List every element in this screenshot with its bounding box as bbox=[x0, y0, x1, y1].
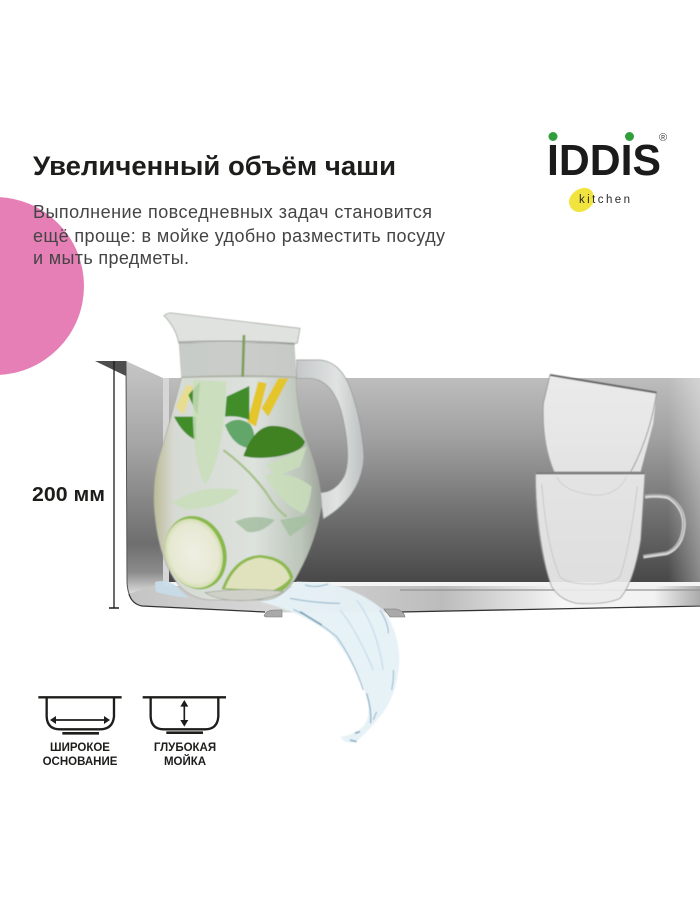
label: wide base: ОСНОВАНИЕ bbox=[43, 756, 118, 768]
description text bbox=[33, 202, 445, 268]
water splash bbox=[260, 582, 399, 743]
dimension line bbox=[109, 361, 119, 608]
mint stem bbox=[243, 335, 244, 377]
label: deep sink: МОЙКА bbox=[164, 755, 206, 768]
sink bottom edge bbox=[129, 594, 700, 612]
description text: Выполнение повседневных задач становится bbox=[33, 202, 432, 222]
glass pitcher with lime water bbox=[154, 313, 364, 601]
icon: deep sink bbox=[143, 697, 226, 733]
sink feet bbox=[264, 609, 405, 617]
top flange bbox=[95, 361, 126, 376]
back wall bbox=[162, 378, 700, 582]
pitcher handle bbox=[297, 360, 364, 519]
splash body bbox=[260, 582, 399, 743]
sink floor bbox=[129, 582, 700, 612]
pale leaves bbox=[172, 380, 312, 537]
description text: и мыть предметы. bbox=[33, 248, 189, 268]
glass mugs bbox=[536, 375, 684, 604]
lime slice left bbox=[156, 508, 236, 597]
pitcher rim bbox=[164, 313, 300, 343]
upper mug bbox=[543, 375, 657, 473]
description text: ещё проще: в мойке удобно разместить посуду bbox=[33, 226, 445, 246]
pitcher neck bbox=[179, 343, 296, 377]
left water splash bbox=[155, 581, 190, 598]
sink left wall bbox=[126, 361, 163, 596]
mug handle bbox=[643, 496, 684, 557]
logo: IDDIS kitchen bbox=[547, 132, 667, 212]
dark green leaves bbox=[174, 382, 249, 440]
pitcher base bbox=[205, 590, 283, 601]
title: Увеличенный объём чаши bbox=[33, 151, 396, 181]
yellow blob bbox=[569, 188, 594, 212]
label: wide base: ШИРОКОЕ bbox=[50, 742, 110, 754]
logo green dots bbox=[548, 132, 634, 141]
label: deep sink bbox=[154, 742, 216, 768]
lower mug bbox=[536, 473, 684, 604]
water surface bbox=[182, 376, 296, 377]
logo wordmark: IDDIS bbox=[547, 136, 661, 185]
lime slice right bbox=[222, 555, 293, 593]
sink illustration bbox=[95, 361, 700, 617]
submerged stem bbox=[223, 450, 287, 517]
mint leaf bbox=[225, 420, 254, 448]
label: deep sink: ГЛУБОКАЯ bbox=[154, 742, 216, 754]
pitcher body bbox=[154, 343, 322, 600]
icon: wide base sink bbox=[38, 697, 122, 733]
registered mark: ® bbox=[659, 132, 667, 144]
lemon slices bbox=[247, 378, 288, 427]
splash streaks bbox=[290, 584, 393, 742]
label: wide base bbox=[43, 742, 118, 768]
dimension label: 200 мм bbox=[32, 484, 105, 506]
kitchen wordmark: kitchen bbox=[579, 194, 630, 206]
pink decorative circle bbox=[0, 197, 84, 375]
lime half bbox=[243, 426, 305, 458]
